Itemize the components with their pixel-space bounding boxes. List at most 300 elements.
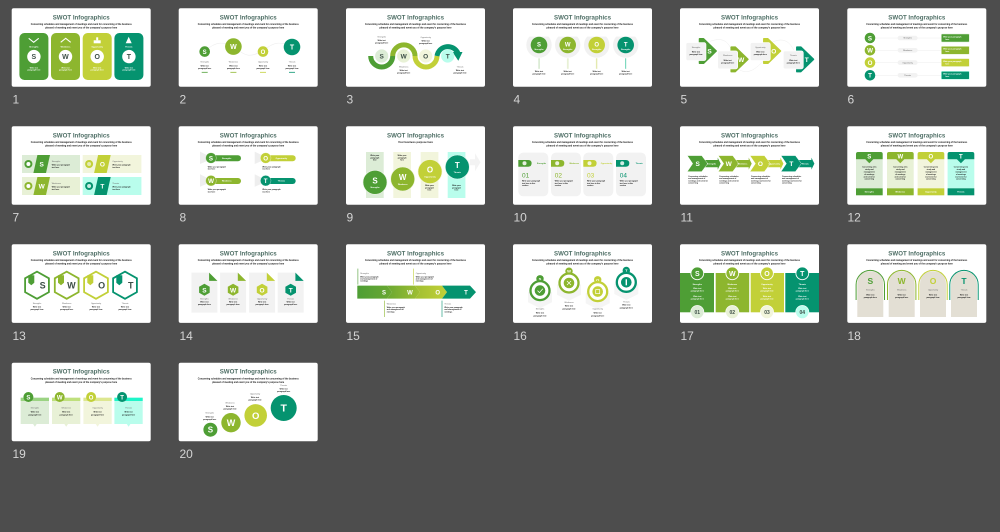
card: Threats: Threats	[287, 297, 294, 300]
subtitle: Concerning schedules and management of meetings and event for concerning of the business	[31, 376, 132, 380]
title: SWOT Infographics	[387, 133, 445, 139]
bubble: Strengths	[203, 412, 217, 437]
card: 01 Strengths	[518, 153, 548, 196]
card: Strengths	[19, 33, 48, 80]
arch: Weakness: paragraph here	[895, 297, 908, 299]
node: Weakness: W	[230, 44, 237, 51]
callout: Strengths: meetings	[360, 280, 368, 283]
column: Opportunity: Opportunity	[761, 283, 774, 286]
node: Strengths: Write text	[201, 64, 209, 67]
card: Strengths	[856, 152, 883, 195]
arch: Strengths: Strengths	[866, 289, 875, 292]
card: Weakness: Weakness	[62, 407, 71, 409]
card: Strengths: Write text	[200, 301, 209, 304]
card: Weakness	[51, 33, 80, 80]
bubble: Opportunity: O	[252, 411, 259, 422]
column: Strengths: paragraph here	[691, 290, 704, 292]
arrow: Strengths	[686, 39, 716, 63]
card: 04 Threats: text here in this	[620, 182, 633, 185]
bubble: Strengths: Write text	[206, 416, 214, 419]
column: Strengths: S	[372, 176, 378, 185]
step: Opportunity	[750, 156, 783, 185]
arrow: Strengths: S	[707, 49, 712, 56]
text: Weakness: Write text	[400, 69, 408, 72]
panel: slide 7	[12, 126, 151, 205]
pin: Strengths: Write text	[535, 70, 543, 73]
subtitle	[866, 258, 968, 266]
badge: Threats	[614, 267, 638, 310]
title: SWOT Infographics	[220, 370, 277, 376]
card: Weakness: Write text	[62, 411, 71, 414]
title: SWOT Infographics	[53, 15, 110, 21]
pin: Strengths: Strengths	[534, 48, 545, 51]
pin: Strengths: S	[537, 43, 541, 49]
row: Threats: Write your paragraph	[943, 73, 961, 76]
card: Opportunity: Opportunity	[257, 297, 267, 300]
row: Weakness: W	[867, 48, 873, 55]
badge: Threats: Threats	[623, 300, 630, 303]
slide number 10: 10	[514, 210, 527, 224]
subtitle: pleased of meeting and event you of the company's purpose here	[546, 144, 619, 148]
slide number 1: 1	[12, 92, 20, 106]
arrow band with letters: T	[464, 290, 468, 296]
card: Strengths: S	[40, 161, 45, 168]
subtitle: Your business purpose here	[398, 140, 434, 144]
item: Strengths: S	[209, 155, 213, 162]
arrow: Strengths: Strengths	[692, 46, 700, 49]
subtitle	[365, 258, 466, 266]
column: Strengths: S	[695, 271, 700, 278]
card: Weakness: and event for	[895, 175, 906, 178]
card: Threats	[948, 152, 974, 195]
item: Threats: Threats	[278, 180, 286, 183]
pin: Opportunity: Strengths	[592, 48, 602, 51]
bubble: Weakness: W	[227, 418, 236, 428]
node: Opportunity	[256, 46, 270, 73]
card: Weakness	[887, 152, 914, 195]
step: Strengths: S	[696, 161, 701, 168]
card: Weakness: study and	[896, 168, 905, 171]
subtitle: Concerning schedules and management of meetings and event for concerning of the business	[699, 22, 800, 26]
card: Weakness: W	[57, 395, 63, 401]
column: Weakness: paragraph	[398, 157, 406, 159]
hexagon: Opportunity: O	[98, 281, 105, 291]
badge: Weakness: Write text	[565, 304, 573, 307]
column: Threats: Threats	[454, 171, 462, 174]
card: Weakness	[220, 273, 246, 313]
column: Strengths	[680, 267, 714, 319]
step: Weakness: and management of	[719, 177, 737, 180]
callout: Strengths: Write your paragraph	[360, 275, 378, 278]
card: Opportunity: Write text	[93, 66, 102, 69]
text: Weakness	[397, 66, 410, 75]
text: Strengths: paragraph here	[375, 43, 388, 45]
step: Opportunity: Opportunity	[768, 162, 781, 165]
hexagon: Strengths: S	[40, 281, 46, 291]
node: Opportunity: O	[261, 50, 266, 56]
slide number 14: 14	[180, 329, 193, 343]
text: Opportunity	[419, 36, 432, 45]
callout: Opportunity: and management of	[416, 278, 433, 281]
column: Threats: Write text	[798, 287, 807, 290]
arch: Strengths	[856, 270, 884, 317]
column: Strengths: 01	[695, 310, 700, 316]
step: Threats: meetings and event for	[782, 179, 802, 182]
panel: slide 5	[680, 8, 819, 87]
row: Weakness: Write your paragraph	[943, 48, 961, 51]
card: Opportunity: paragraph here	[91, 414, 104, 416]
card: Strengths: Write text	[31, 411, 39, 414]
panel: slide 8	[179, 126, 318, 205]
arch: Strengths: paragraph here	[864, 297, 877, 299]
item: Weakness: Weakness	[222, 181, 232, 183]
bubble: Opportunity: paragraph here	[248, 400, 262, 402]
card: Opportunity: Opportunity	[91, 45, 104, 48]
badge: Weakness: Weakness	[564, 302, 574, 304]
card: Strengths: S	[32, 54, 37, 61]
panel: slide 3	[346, 8, 485, 87]
title: SWOT Infographics	[721, 133, 779, 139]
subtitle: pleased of meeting and event you of the company's purpose here	[212, 144, 285, 148]
card: Threats: Threats	[957, 190, 965, 194]
column: Strengths: here	[373, 160, 377, 162]
node: Strengths	[198, 46, 211, 73]
bubble: Weakness	[221, 402, 241, 432]
column: Weakness: Write your	[398, 154, 407, 157]
column: Weakness: Write text	[728, 287, 737, 290]
bubble: Strengths: paragraph here	[203, 419, 216, 421]
card: 02 Weakness: 02	[555, 172, 562, 179]
column: Threats: here	[455, 190, 458, 192]
hexagon: Threats	[113, 272, 137, 311]
arrow: Weakness: paragraph here	[721, 62, 734, 64]
step: Weakness: concerning	[719, 183, 729, 185]
card: Threats: T	[120, 395, 124, 401]
column: Opportunity: O	[427, 166, 433, 175]
row: Opportunity: here	[945, 63, 949, 65]
callout: Opportunity: meetings	[416, 280, 424, 283]
pin: Strengths	[526, 31, 552, 75]
arrow: faint	[470, 153, 480, 171]
column: Strengths	[363, 152, 387, 198]
step: Threats: T	[789, 161, 793, 168]
column: Opportunity: paragraph here	[760, 299, 774, 301]
arrow band with letters	[357, 286, 476, 299]
card: Threats: Write your paragraph	[112, 186, 131, 189]
card: Threats: Write text	[125, 66, 133, 69]
pin: Opportunity: paragraph here	[590, 73, 603, 75]
card: Threats: paragraph here	[284, 304, 297, 306]
subtitle	[198, 140, 299, 148]
arrow band with letters: S	[382, 290, 386, 296]
item: Opportunity: O	[263, 155, 268, 162]
node: Weakness: Write text	[229, 64, 238, 67]
panel: slide 19	[12, 363, 151, 441]
card: 01 Strengths: 01	[522, 172, 530, 179]
card: Strengths: paragraph here	[28, 414, 41, 416]
card: Opportunity: O	[929, 154, 934, 160]
column: Threats: paragraph here	[796, 299, 809, 301]
subtitle: pleased of meeting and event you of the company's purpose here	[714, 144, 786, 148]
card: Strengths: Strengths	[865, 190, 875, 194]
panel: slide 2	[179, 8, 318, 87]
subtitle: Concerning schedules and management of meetings and event for concerning of the business	[31, 258, 132, 262]
subtitle	[866, 140, 968, 148]
card: Threats: study and	[957, 168, 965, 171]
card: Opportunity: paragraph here	[256, 304, 269, 306]
card: Opportunity: management	[925, 171, 937, 174]
item: Strengths: text here	[208, 168, 215, 171]
subtitle: Concerning schedules and management of meetings and event for concerning of the business	[198, 258, 299, 262]
item: Opportunity: Write your paragraph	[262, 165, 281, 168]
card: Opportunity: Opportunity	[92, 406, 103, 409]
row: Opportunity: Opportunity	[902, 61, 913, 64]
card: Opportunity	[83, 155, 141, 173]
arch: Threats: Write text	[960, 294, 968, 297]
card: Threats: and event for	[955, 175, 967, 178]
card: Weakness: Write your paragraph	[52, 186, 70, 189]
card: Weakness: Weakness	[52, 183, 61, 185]
step: Weakness: Concerning schedules	[719, 176, 739, 178]
bubble: Weakness: Write text	[226, 405, 234, 408]
card: Opportunity: Opportunity	[112, 160, 123, 163]
item: Strengths: Write your paragraph	[208, 165, 226, 168]
slide number 13: 13	[12, 329, 26, 343]
column: Threats: T	[800, 271, 805, 278]
arch: Opportunity: Opportunity	[928, 289, 938, 292]
circle letters: T	[446, 53, 450, 60]
card: 03 Opportunity: Write your paragraph	[587, 180, 605, 183]
hexagon: Opportunity	[84, 272, 108, 311]
step: Strengths: Strengths	[707, 162, 717, 165]
pin: Strengths: paragraph here	[532, 73, 546, 75]
arrow: Threats: T	[805, 57, 809, 64]
step: Threats: concerning	[782, 183, 792, 185]
item: Opportunity: text here	[262, 168, 270, 171]
subtitle: Concerning schedules and management of meetings and event for concerning of the business	[866, 140, 968, 144]
subtitle: Concerning schedules and management of meetings and event for concerning of the business	[365, 22, 466, 26]
subtitle: Concerning schedules and management of meetings and event for concerning of the business	[532, 140, 633, 144]
bubble: Threats: Threats	[280, 384, 287, 387]
item: Weakness: Write your paragraph	[208, 188, 226, 191]
card: 01 Strengths: section	[522, 184, 528, 187]
subtitle: pleased of meeting and event you of the company's purpose here	[45, 26, 118, 30]
card: Threats: of meetings	[956, 173, 966, 176]
node: Threats: T	[290, 45, 295, 52]
card: Threats	[114, 392, 143, 427]
card: Weakness: Write text	[61, 66, 70, 69]
node: Threats: paragraph here	[285, 68, 299, 70]
card: Weakness: W	[39, 183, 46, 190]
circle letters: S	[380, 53, 385, 60]
column: Opportunity: here	[428, 190, 431, 192]
card: 03 Opportunity	[583, 153, 613, 196]
card: Strengths: study and	[865, 168, 874, 171]
card: Opportunity: of meetings	[926, 173, 936, 176]
text: Opportunity: Write text	[422, 40, 430, 43]
card: Opportunity: O	[89, 395, 94, 401]
card: Opportunity	[249, 273, 275, 313]
card: Threats	[278, 273, 304, 313]
column: Weakness	[716, 267, 749, 319]
panel: slide 4	[513, 8, 652, 87]
panel: slide 9	[346, 126, 485, 205]
node: Threats: Write text	[288, 64, 296, 67]
text: Threats: paragraph here	[453, 73, 467, 75]
card: Opportunity: O	[94, 54, 100, 61]
column: Opportunity: Write text	[763, 295, 771, 298]
slide number 12: 12	[848, 210, 861, 224]
slide number 16: 16	[514, 329, 527, 343]
card: Weakness: Weakness	[895, 192, 906, 194]
step: Opportunity: and management of	[751, 177, 768, 180]
pin: Threats: paragraph here	[619, 73, 632, 75]
callout: Weakness: Weakness	[387, 303, 396, 305]
card: Strengths: Concerning area	[862, 167, 877, 169]
callout: Opportunity: Opportunity	[416, 272, 426, 275]
title: SWOT Infographics	[220, 251, 277, 257]
arrow: Opportunity: paragraph here	[754, 54, 767, 56]
subtitle: pleased of meeting and event you of the company's purpose here	[380, 262, 452, 266]
subtitle	[31, 376, 132, 384]
subtitle	[31, 258, 132, 266]
item: Strengths: Strengths	[222, 157, 232, 160]
card: Opportunity	[83, 33, 112, 80]
card: Weakness: of meetings	[895, 173, 905, 176]
badge: Strengths: S	[539, 276, 542, 281]
step: Opportunity: Concerning schedules	[751, 176, 770, 178]
text: Threats	[453, 65, 467, 75]
title: SWOT Infographics	[554, 251, 612, 257]
card: 03 Opportunity: section	[587, 184, 593, 187]
pin: Weakness	[555, 31, 581, 75]
node: Threats: Threats	[289, 61, 295, 64]
arch: Threats: T	[961, 276, 967, 286]
card: Strengths	[21, 392, 49, 427]
card: Weakness	[52, 392, 80, 427]
row: Opportunity: O	[868, 60, 873, 67]
panel: slide 10	[513, 126, 652, 205]
arch: Strengths: S	[867, 276, 873, 286]
subtitle	[365, 22, 466, 30]
card: 01 Strengths: Write your paragraph	[522, 180, 540, 183]
callout: Threats: and management of	[444, 308, 462, 311]
column: Threats: Write text	[798, 295, 807, 298]
callout: Threats: Threats	[444, 302, 451, 305]
text: Strengths	[375, 35, 388, 45]
title: SWOT Infographics	[53, 251, 110, 257]
column: Weakness	[391, 152, 415, 198]
column: Weakness: W	[729, 271, 736, 278]
column: Opportunity	[751, 267, 784, 319]
hexagon: Strengths: Strengths	[33, 302, 41, 305]
badge: Weakness: paragraph here	[562, 308, 576, 310]
card: Threats: Threats	[112, 182, 119, 185]
arrow: Weakness: Write text	[724, 59, 732, 62]
card: Threats: Write text	[287, 301, 295, 304]
arrow band with letters: W	[407, 290, 413, 296]
card: Weakness: text here	[52, 188, 59, 191]
subtitle: Concerning schedules and management of meetings and event for concerning of the business	[866, 258, 968, 262]
circle letters	[375, 49, 454, 63]
panel: slide 17	[680, 244, 819, 323]
arrow: Opportunity: Opportunity	[755, 46, 765, 49]
slide number 19: 19	[12, 447, 26, 461]
badge: Strengths: Write text	[536, 312, 544, 314]
node: Weakness	[225, 38, 242, 73]
text: Weakness: Weakness	[399, 66, 408, 68]
pin: Weakness: Write text	[564, 70, 572, 73]
column: Opportunity: Write text	[763, 287, 771, 290]
column: Threats	[785, 267, 819, 319]
column: Threats: paragraph here	[796, 290, 809, 292]
card: 02 Weakness: Weakness	[569, 163, 580, 165]
subtitle: Concerning schedules and management of meetings and event for concerning of the business	[198, 140, 299, 144]
subtitle	[532, 140, 633, 148]
card: Opportunity: O	[100, 161, 105, 168]
column: Strengths: Strengths	[370, 186, 381, 189]
badge: Opportunity: Opportunity	[593, 308, 603, 311]
panel: slide 1	[12, 8, 151, 87]
subtitle: pleased of meeting and event you of the company's purpose here	[714, 262, 786, 266]
slide number 18: 18	[848, 329, 861, 343]
subtitle: Concerning schedules and management of meetings and event for concerning of the business	[699, 258, 800, 262]
subtitle: Concerning schedules and management of meetings and event for concerning of the business	[198, 376, 299, 380]
card: 04 Threats: Write your paragraph	[620, 180, 638, 183]
hexagon: Opportunity: paragraph here	[89, 309, 103, 311]
row: Strengths: S	[868, 35, 872, 42]
subtitle	[699, 22, 800, 30]
title: SWOT Infographics	[387, 251, 445, 257]
column: Opportunity	[418, 152, 442, 198]
step: Threats: and management of	[782, 177, 799, 180]
item: Opportunity	[255, 152, 296, 171]
card: Opportunity	[918, 152, 944, 195]
column: Threats: T	[455, 161, 460, 170]
callout: Opportunity	[413, 269, 434, 285]
card: Opportunity: and event for	[925, 175, 937, 178]
step: Opportunity: O	[758, 161, 763, 168]
connector curve	[205, 43, 292, 55]
callout: Strengths: Strengths	[360, 272, 369, 275]
row: Strengths: Strengths	[903, 37, 912, 40]
badge: Opportunity: paragraph here	[591, 315, 604, 317]
arch: Weakness: Write text	[898, 294, 906, 297]
callout: Threats: Write your paragraph	[444, 306, 463, 309]
pin: Weakness: W	[565, 43, 571, 49]
arrow: Opportunity: Write text	[756, 51, 765, 54]
arch: Strengths: Write text	[866, 294, 875, 297]
node: Strengths: S	[203, 50, 207, 56]
card: Weakness: W	[897, 154, 903, 160]
badge: Threats: paragraph here	[620, 308, 633, 310]
card: Strengths: paragraph here	[27, 70, 40, 72]
card: 03 Opportunity: Opportunity	[601, 162, 613, 165]
bubble: Weakness: Weakness	[225, 402, 235, 404]
card: Weakness: Weakness	[228, 298, 238, 300]
subtitle: Concerning schedules and management of meetings and event for concerning of the business	[866, 22, 968, 26]
subtitle	[198, 258, 299, 266]
title: SWOT Infographics	[888, 133, 946, 139]
bubble: Threats	[271, 384, 297, 421]
panel: slide 20	[179, 363, 318, 441]
text: Strengths: Write text	[378, 39, 386, 42]
hexagon: Threats: paragraph here	[118, 309, 132, 311]
node: Opportunity: paragraph here	[256, 68, 270, 70]
card: Strengths: Strengths	[29, 45, 39, 48]
card: 01 Strengths: text here in this	[522, 182, 535, 185]
subtitle: Concerning schedules and management of meetings and event for concerning of the business	[198, 22, 299, 26]
